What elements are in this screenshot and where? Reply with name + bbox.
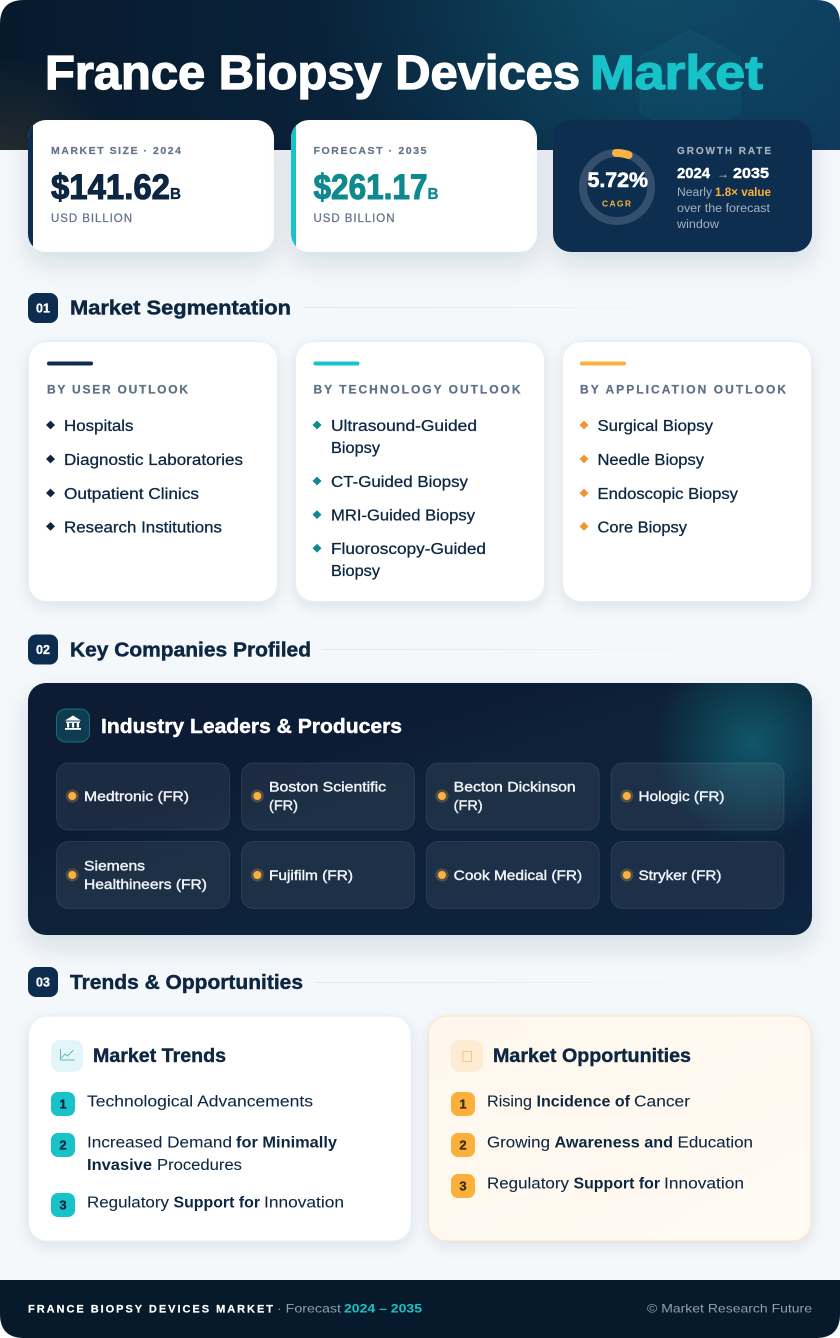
opportunity 1: Cancer (634, 1094, 690, 1111)
opportunity 1 (451, 1092, 690, 1116)
panel: market trends: Market Trends (93, 1046, 226, 1067)
panel: by application outlook: BY APPLICATION OUTLOOK (580, 382, 786, 396)
panel: by user outlook: BY USER OUTLOOK (47, 382, 188, 396)
opportunity 2: Growing (487, 1135, 550, 1152)
trend 1: 1 (59, 1096, 67, 1112)
list: application items: Core Biopsy (598, 520, 687, 536)
growth text: 2035 (733, 166, 769, 182)
chip: Becton Dickinson (426, 763, 599, 830)
list: technology items: CT-Guided Biopsy (331, 474, 468, 491)
list: application items: Needle Biopsy (598, 452, 704, 469)
chip: Becton Dickinson: (FR) (454, 797, 483, 813)
chip: Hologic: Hologic (FR) (638, 788, 724, 804)
trend 1: Technological Advancements (87, 1094, 313, 1111)
chip: Boston Scientific: (FR) (269, 797, 298, 813)
chip: Siemens Healthineers (56, 842, 230, 908)
header band (0, 0, 840, 150)
list: user items (46, 418, 243, 536)
icon: line chart (51, 1040, 83, 1072)
panel: market trends (28, 1016, 411, 1241)
chip: Boston Scientific: Boston Scientific (269, 779, 386, 795)
opportunity 3 (451, 1174, 744, 1198)
list: user items: Outpatient Clinics (64, 486, 199, 503)
stat card: forecast (291, 120, 537, 252)
trend 2: for Minimally (236, 1135, 337, 1152)
footer: FRANCE BIOPSY DEVICES MARKET (28, 1304, 273, 1316)
CAGR ring: 5.72% (588, 169, 648, 192)
opportunity 2 (451, 1133, 753, 1157)
opportunity 2: Education (678, 1135, 753, 1152)
panel: by user outlook (28, 342, 278, 602)
chip: Cook Medical: Cook Medical (FR) (454, 867, 582, 883)
section heading 01: 01 (36, 302, 50, 316)
panel: market opportunities (428, 1016, 811, 1241)
growth text: Nearly (677, 187, 712, 199)
list: user items: Hospitals (64, 418, 134, 435)
chip: Medtronic: Medtronic (FR) (84, 788, 189, 804)
footer (0, 1280, 840, 1338)
opportunity 3: Innovation (664, 1176, 744, 1193)
trend 3: Regulatory (87, 1195, 169, 1212)
list: technology items: Fluoroscopy-Guided (331, 541, 486, 558)
list: user items: Diagnostic Laboratories (64, 452, 243, 469)
panel: by technology outlook (296, 342, 544, 602)
trend 3: Support for (174, 1195, 260, 1212)
panel: industry leaders (28, 683, 812, 935)
chip: Becton Dickinson: Becton Dickinson (454, 779, 576, 795)
stat card: market size: B (170, 186, 181, 203)
section heading 03 (28, 967, 753, 997)
opportunity 2: 2 (459, 1138, 467, 1152)
trend 2 (51, 1133, 337, 1174)
panel heading: Industry Leaders & Producers (101, 715, 402, 738)
title: France Biopsy Devices (45, 47, 580, 100)
stat card: market size: MARKET SIZE · 2024 (51, 145, 181, 157)
panel: by technology outlook: BY TECHNOLOGY OUTLOOK (314, 382, 521, 396)
list: technology items (312, 418, 486, 580)
list: technology items: Biopsy (331, 563, 380, 580)
list: technology items: Ultrasound-Guided (331, 418, 477, 435)
trend 2: Procedures (157, 1157, 242, 1174)
title: Market (590, 47, 763, 100)
growth text: 2024 (677, 166, 710, 182)
footer: 2024 – 2035 (344, 1302, 422, 1316)
CAGR ring (583, 153, 651, 221)
list: technology items: MRI-Guided Biopsy (331, 508, 475, 524)
growth text (676, 146, 771, 231)
stat card: market size: USD BILLION (51, 213, 132, 225)
stat card: forecast: USD BILLION (314, 213, 394, 225)
opportunity 3: 3 (459, 1178, 467, 1194)
stat card: forecast: FORECAST · 2035 (314, 145, 427, 157)
chip: Stryker (611, 842, 784, 908)
panel: market opportunities: Market Opportunities (493, 1046, 691, 1067)
stat card: growth rate (553, 120, 812, 252)
section heading 02 (28, 634, 760, 664)
section heading 02: 02 (36, 643, 50, 657)
opportunity 1: 1 (459, 1096, 467, 1112)
opportunity 2: Awareness and (554, 1135, 673, 1152)
footer: © Market Research Future (647, 1302, 812, 1316)
trend 3: 3 (59, 1198, 67, 1212)
trend 2: Increased Demand (87, 1135, 232, 1152)
chip: Hologic (611, 763, 784, 830)
icon: opportunity glyph (451, 1040, 483, 1072)
list: application items: Surgical Biopsy (598, 418, 713, 435)
list: application items: Endoscopic Biopsy (598, 486, 738, 503)
chip: Siemens Healthineers: Siemens (84, 858, 145, 874)
stat card: market size: $141.62 (51, 168, 170, 207)
chip: Boston Scientific (242, 763, 414, 830)
chip: Siemens Healthineers: Healthineers (FR) (84, 876, 207, 892)
panel: by application outlook (562, 342, 812, 602)
icon: institution (56, 709, 90, 742)
section heading 03: Trends & Opportunities (70, 972, 303, 994)
stat card: forecast: $261.17 (314, 168, 428, 207)
list: user items: Research Institutions (64, 520, 222, 536)
opportunity 1: Rising (487, 1094, 532, 1111)
list: application items (580, 418, 738, 536)
growth text: over the forecast (677, 203, 771, 215)
chip: Fujifilm: Fujifilm (FR) (269, 867, 353, 883)
growth text: → (717, 167, 729, 181)
chip: Fujifilm (242, 842, 414, 908)
trend 3: Innovation (264, 1195, 344, 1212)
footer: · Forecast (277, 1302, 342, 1316)
stat card: forecast: B (428, 186, 438, 203)
list: technology items: Biopsy (331, 440, 380, 457)
growth text: window (676, 219, 720, 231)
stat card: market size (28, 120, 274, 252)
opportunity 3: Regulatory (487, 1176, 569, 1193)
section heading 03: 03 (36, 976, 50, 990)
trend 2: Invasive (87, 1157, 152, 1174)
trend 1 (51, 1092, 313, 1116)
growth text: 1.8× value (715, 187, 771, 199)
opportunity 1: Incidence of (536, 1094, 631, 1111)
section heading 02: Key Companies Profiled (70, 640, 311, 662)
section heading 01: Market Segmentation (70, 298, 291, 320)
trend 3 (51, 1193, 344, 1217)
trend 2: 2 (59, 1138, 67, 1152)
section heading 01 (28, 293, 740, 323)
opportunity 3: Support for (574, 1176, 660, 1193)
growth text: GROWTH RATE (677, 146, 771, 157)
chip: Medtronic (56, 763, 230, 830)
chip: Cook Medical (426, 842, 599, 908)
CAGR ring: CAGR (602, 198, 631, 208)
chip: Stryker: Stryker (FR) (638, 867, 722, 883)
